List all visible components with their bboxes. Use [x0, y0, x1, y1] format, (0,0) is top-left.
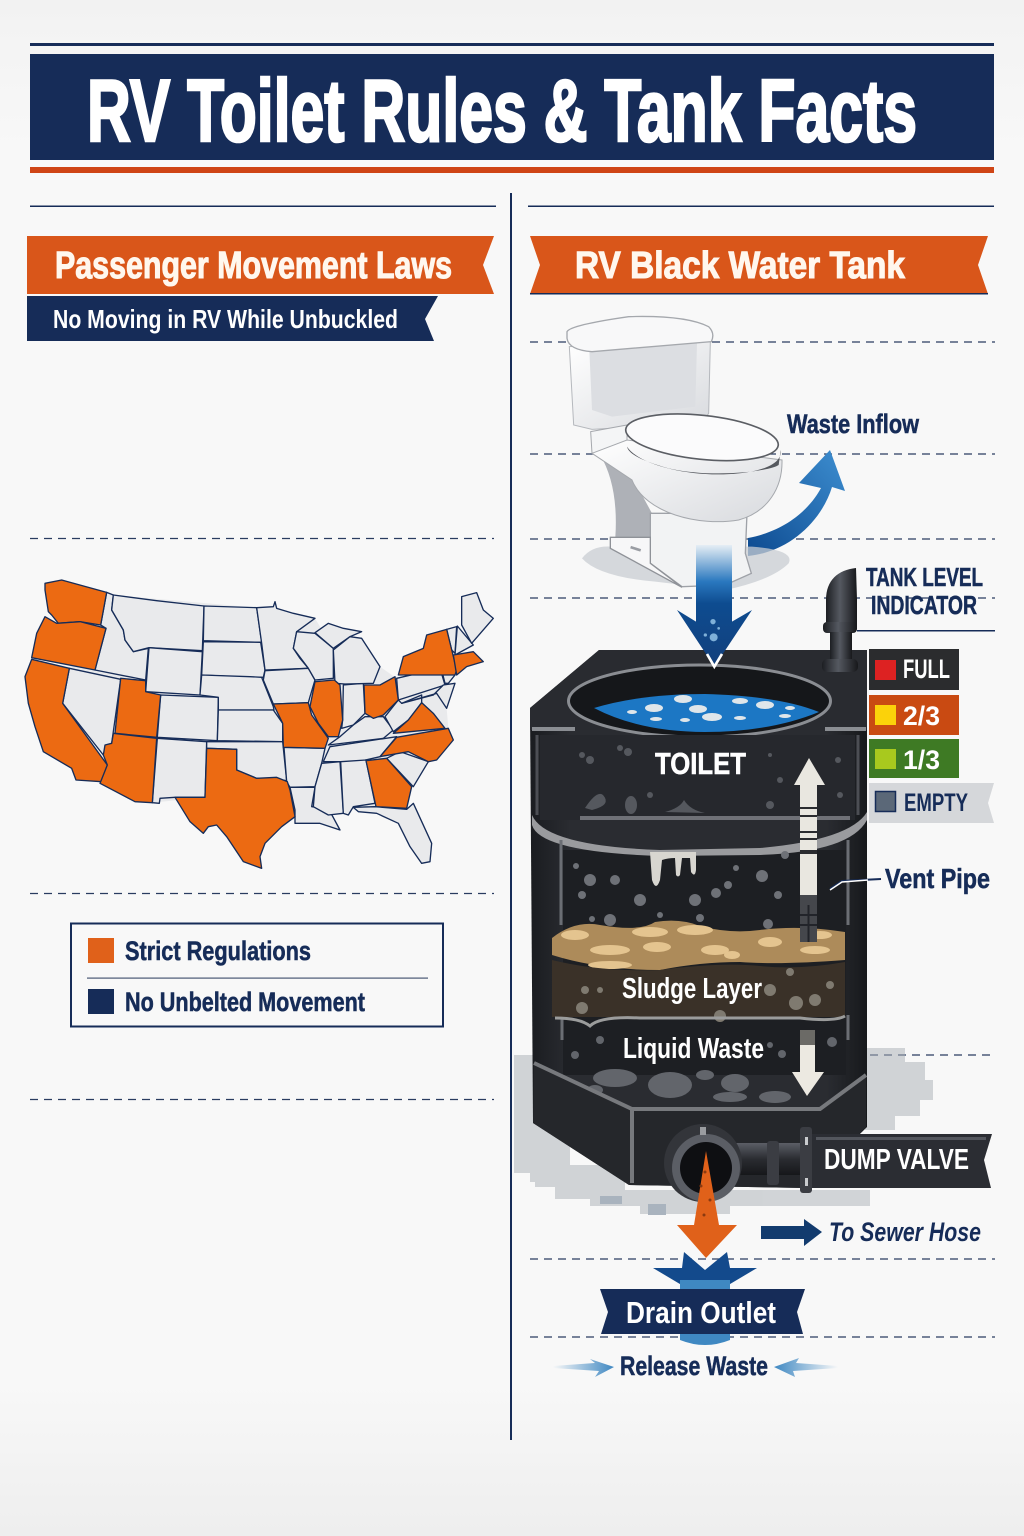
liquid waste label: Liquid Waste [623, 1033, 764, 1065]
blue waste inflow arrow [748, 450, 845, 556]
level: empty: EMPTY [904, 789, 968, 817]
heading ribbon: rv black water tank [530, 236, 988, 294]
drain outlet splash [653, 1252, 757, 1345]
arrow down [792, 1030, 824, 1096]
toilet [567, 316, 790, 590]
drain outlet ribbon [600, 1289, 805, 1334]
lower chamber [563, 850, 846, 1075]
US map [25, 580, 493, 868]
level: one third [869, 739, 959, 778]
orange title underline [30, 167, 994, 173]
top rule [30, 43, 994, 46]
vent pipe callout [830, 863, 990, 894]
tank level indicator title [857, 562, 995, 632]
tank opening with water [568, 665, 830, 737]
blue down arrow into tank [677, 545, 752, 667]
vent pipe elbow [822, 568, 858, 672]
liquid waste pebbles [571, 1036, 837, 1103]
sludge divider line [555, 1016, 845, 1026]
states with strict regulations [25, 580, 483, 868]
rim highlight [532, 727, 866, 731]
tank level indicator title: TANK LEVEL [866, 562, 983, 592]
level: full [869, 649, 959, 690]
dump valve ribbon: DUMP VALVE [824, 1144, 969, 1176]
vent pipe callout: Vent Pipe [885, 863, 990, 894]
sludge crust [552, 921, 845, 970]
level: two thirds [869, 695, 959, 735]
dump valve fitting and pipe [664, 1124, 820, 1202]
drips [650, 852, 696, 886]
tank level indicator title: INDICATOR [871, 590, 977, 620]
floor shadow [582, 546, 790, 590]
to sewer hose label with arrow: To Sewer Hose [829, 1217, 981, 1247]
to sewer hose label with arrow [761, 1217, 981, 1247]
panel: passenger movement laws [25, 236, 494, 1100]
lower chamfer rim [533, 1063, 866, 1188]
tank body [530, 650, 867, 1188]
level: empty [869, 783, 994, 823]
legend item: strict regulations: Strict Regulations [125, 936, 311, 966]
upper tank panel [540, 735, 855, 820]
panel: black water tank [514, 236, 995, 1381]
lower tank speckles [573, 851, 789, 929]
waste inflow label: Waste Inflow [787, 409, 920, 439]
drain outlet ribbon: Drain Outlet [626, 1295, 776, 1330]
heading ribbon: passenger movement laws: Passenger Movement Laws [55, 245, 452, 287]
frame struts [561, 840, 848, 1040]
heading ribbon: rv black water tank: RV Black Water Tank [575, 245, 906, 287]
sub-heading ribbon [27, 296, 438, 341]
upper tank blotches [579, 745, 843, 814]
level: one third: 1/3 [903, 745, 940, 775]
legend item: strict regulations [88, 936, 311, 966]
map underlay [69, 592, 448, 817]
states without strict rules [63, 592, 493, 863]
title banner [30, 54, 994, 160]
tank level indicator [869, 649, 994, 823]
level: full: FULL [903, 654, 950, 684]
tank ground shadow [514, 1048, 933, 1215]
release waste label with arrows [553, 1351, 838, 1381]
sub-heading ribbon: No Moving in RV While Unbuckled [53, 304, 398, 334]
toilet pedestal [600, 455, 751, 587]
centre divider [510, 193, 512, 1440]
level: two thirds: 2/3 [903, 701, 940, 731]
black water tank [530, 650, 867, 1188]
tank waist band [532, 812, 867, 856]
heading ribbon: passenger movement laws [27, 236, 494, 294]
toilet bowl [591, 407, 782, 522]
orange dump arrow [677, 1151, 737, 1258]
release waste label with arrows: Release Waste [620, 1351, 768, 1381]
map legend [71, 924, 443, 1026]
legend item: no unbelted movement: No Unbelted Movement [125, 987, 365, 1017]
sludge band [552, 960, 845, 1017]
vent pipe arrow up [794, 758, 825, 942]
dump valve ribbon [812, 1134, 992, 1188]
tank label: TOILET [655, 746, 746, 781]
sludge label: Sludge Layer [622, 973, 762, 1005]
toilet tank [567, 316, 713, 429]
